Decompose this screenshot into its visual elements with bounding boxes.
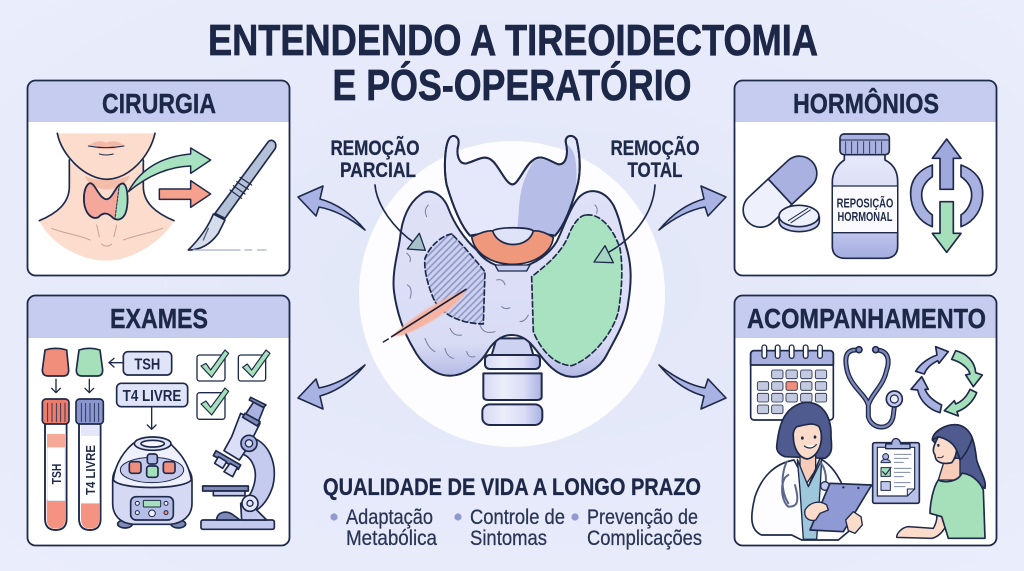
- stethoscope: [846, 347, 902, 427]
- lobe texture: [407, 205, 615, 363]
- panel: acompanhamento: [734, 296, 996, 546]
- label: remoção total: REMOÇÃO: [610, 137, 700, 160]
- cricoid cartilage: [472, 231, 553, 264]
- neck and thyroid illustration: [39, 133, 276, 261]
- arrow: to hormônios: [659, 186, 726, 230]
- title: [208, 16, 818, 110]
- larynx cartilage: [445, 136, 580, 236]
- lab illustration: TSH: [134, 356, 160, 373]
- bullet: controle de sintomas: Sintomas: [470, 527, 547, 550]
- scalpel: [188, 140, 276, 250]
- bullet: prevenção de complicações: Prevenção de: [587, 506, 698, 529]
- panel: hormônios: [734, 80, 996, 276]
- cycle arrows: [911, 347, 982, 416]
- red arrow: [159, 181, 211, 207]
- total removal green area: [532, 215, 622, 366]
- bullet: adaptação metabólica: [330, 506, 437, 550]
- panel: exames: [28, 296, 290, 546]
- bullet: adaptação metabólica: Metabólica: [346, 527, 437, 550]
- thyroid diagram: [375, 136, 655, 425]
- trachea: [482, 338, 542, 425]
- lab illustration: T4 LIVRE: [123, 388, 182, 405]
- bullet: prevenção de complicações: [571, 506, 702, 550]
- callout heading: QUALIDADE DE VIDA A LONGO PRAZO: [323, 474, 701, 501]
- heading: exames: EXAMES: [110, 303, 208, 334]
- doctor's clipboard: [810, 483, 872, 532]
- doctor stethoscope: [782, 462, 826, 507]
- arrow: to cirurgia: [298, 186, 365, 230]
- title: E PÓS-OPERATÓRIO: [332, 60, 692, 110]
- bottle: REPOSIÇÃO: [837, 195, 893, 210]
- label: remoção total: [610, 137, 700, 182]
- capsule: [736, 149, 824, 234]
- tablet: [779, 205, 819, 232]
- patient: [897, 425, 985, 538]
- heading: cirurgia: CIRURGIA: [102, 88, 216, 119]
- tube TSH: [42, 399, 69, 530]
- lab illustration: [42, 348, 274, 530]
- clipboard: [873, 438, 919, 503]
- checkboxes: [197, 350, 270, 419]
- central white circle with thyroid illustration: [359, 136, 665, 447]
- hormone level arrows: [911, 139, 983, 252]
- thyroid: [84, 183, 127, 219]
- tube T4 livre: T4 LIVRE: [83, 445, 98, 495]
- incision line: [193, 248, 266, 252]
- label: remoção parcial: REMOÇÃO: [330, 137, 420, 160]
- panel: cirurgia: [28, 80, 290, 276]
- callout: qualidade de vida: [323, 474, 702, 550]
- pointer arrow to partial removal: [375, 185, 425, 250]
- bottle: HORMONAL: [837, 209, 893, 224]
- microscope: [201, 397, 274, 529]
- heading: acompanhamento: ACOMPANHAMENTO: [747, 303, 986, 334]
- medication illustration: [736, 134, 983, 258]
- partial removal hatched area: [425, 234, 485, 324]
- title: ENTENDENDO A TIREOIDECTOMIA: [208, 16, 818, 65]
- label: remoção parcial: [330, 137, 420, 182]
- arrow: to acompanhamento: [659, 365, 726, 409]
- tube TSH: TSH: [49, 464, 64, 484]
- thyroid lobes: [394, 191, 631, 377]
- mouth: [88, 141, 124, 149]
- follow-up illustration: [751, 345, 985, 540]
- calendar: [751, 345, 833, 420]
- bullet: controle de sintomas: Controle de: [470, 506, 565, 529]
- arrow: to exames: [298, 365, 365, 409]
- pointer arrow to total removal: [594, 185, 655, 263]
- bullet: controle de sintomas: [454, 506, 565, 550]
- label boxes: [123, 352, 172, 375]
- bullet: prevenção de complicações: Complicações: [587, 527, 702, 550]
- label: remoção total: TOTAL: [628, 159, 683, 182]
- heading: hormônios: HORMÔNIOS: [793, 87, 939, 119]
- bottle: [832, 134, 898, 258]
- centrifuge: [113, 437, 192, 528]
- green curved arrow: [128, 148, 211, 192]
- loose caps: [42, 348, 69, 376]
- bullet: adaptação metabólica: Adaptação: [346, 506, 433, 529]
- doctor: [752, 402, 872, 540]
- label: remoção parcial: PARCIAL: [340, 159, 416, 182]
- incision: [383, 289, 467, 342]
- tube T4 livre: [76, 399, 103, 530]
